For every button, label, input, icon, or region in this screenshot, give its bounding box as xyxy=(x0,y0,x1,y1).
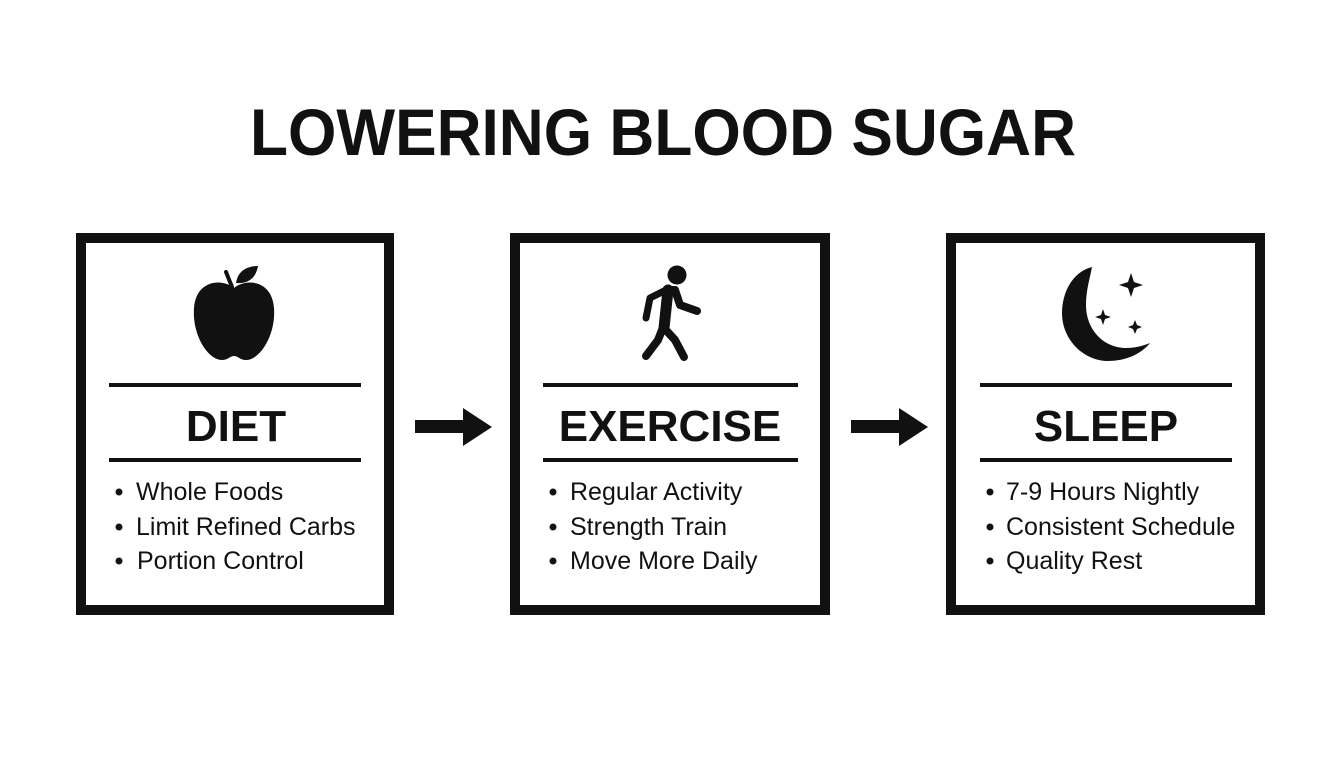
list: sleep: 7-9 Hours Nightly xyxy=(1006,478,1200,506)
panel: diet xyxy=(81,238,389,610)
icon: apple xyxy=(194,266,274,360)
heading: exercise: EXERCISE xyxy=(559,402,781,451)
list: exercise xyxy=(550,478,758,575)
list: sleep: Consistent Schedule xyxy=(1006,513,1235,541)
list: sleep xyxy=(986,478,1235,575)
icon: moon and stars xyxy=(1062,267,1150,361)
heading: sleep: SLEEP xyxy=(1034,402,1178,451)
list: diet: Limit Refined Carbs xyxy=(136,513,356,541)
panel: exercise xyxy=(515,238,825,610)
arrow 2 xyxy=(851,408,928,446)
list: diet: Portion Control xyxy=(137,547,304,575)
list: diet: Whole Foods xyxy=(136,478,283,506)
list: sleep: Quality Rest xyxy=(1006,547,1142,575)
list: diet xyxy=(116,478,356,575)
title: LOWERING BLOOD SUGAR xyxy=(250,95,1076,169)
list: exercise: Move More Daily xyxy=(570,547,758,575)
panel: sleep xyxy=(951,238,1260,610)
list: exercise: Strength Train xyxy=(570,513,727,541)
list: exercise: Regular Activity xyxy=(570,478,743,506)
icon: walking person xyxy=(646,266,697,357)
heading: diet: DIET xyxy=(186,402,286,451)
arrow 1 xyxy=(415,408,492,446)
